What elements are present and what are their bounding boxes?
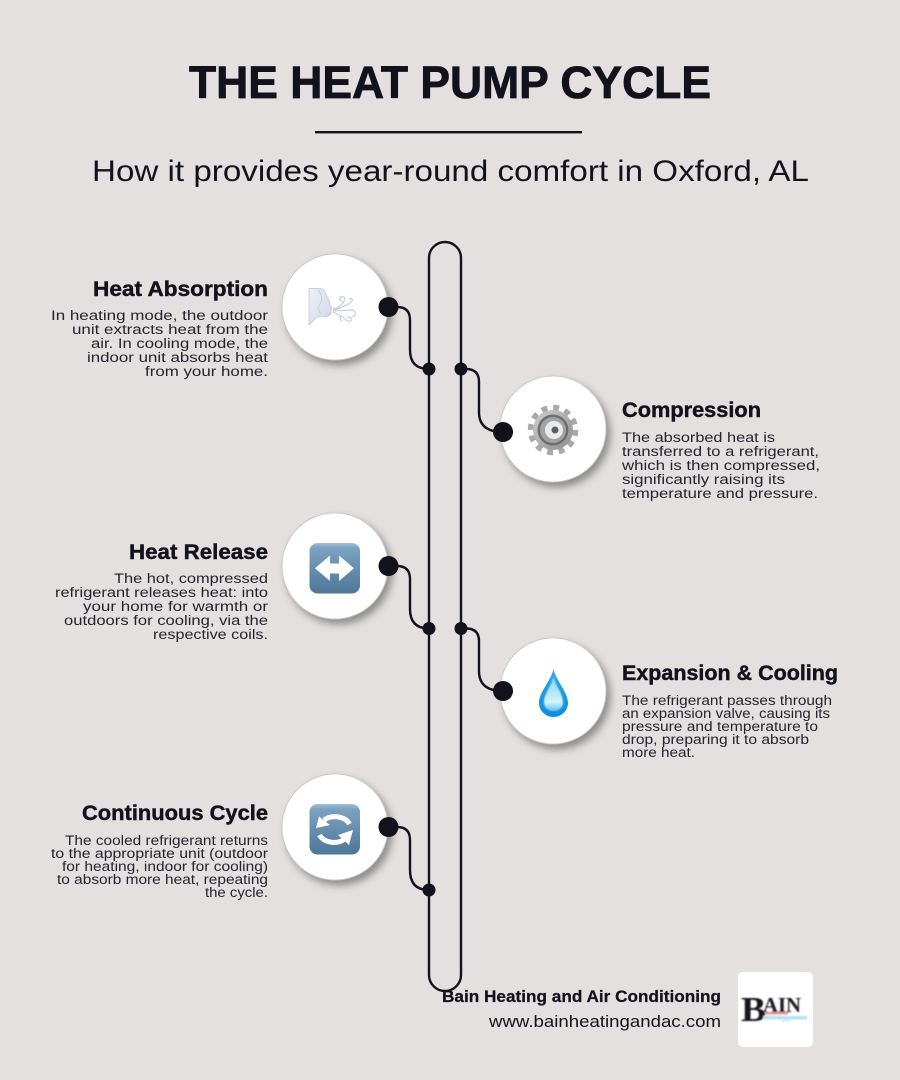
description: air. In cooling mode, the [91, 336, 268, 352]
description: from your home. [145, 364, 268, 380]
description: significantly raising its [622, 472, 785, 488]
connector [389, 827, 429, 890]
description: more heat. [622, 745, 695, 761]
logo [738, 972, 813, 1047]
title: THE HEAT PUMP CYCLE [189, 57, 711, 108]
connection dot [493, 681, 513, 701]
icon: face blowing wind [309, 288, 355, 325]
description: outdoors for cooling, via the [64, 613, 268, 629]
icon: gear [532, 408, 574, 452]
connection dot [493, 422, 513, 442]
description [621, 430, 820, 502]
description: which is then compressed, [621, 458, 820, 474]
icon circle [282, 513, 388, 619]
heading: Expansion & Cooling [622, 662, 838, 685]
connector [389, 566, 429, 628]
junction dot [422, 884, 436, 896]
connector [389, 307, 429, 369]
panel: Expansion & Cooling [454, 622, 838, 761]
central pipeline track [429, 242, 461, 991]
icon: water drop [539, 669, 568, 717]
heading: Continuous Cycle [82, 802, 268, 825]
connection dot [378, 817, 398, 837]
junction dot [422, 362, 436, 376]
description: transferred to a refrigerant, [622, 444, 819, 460]
description: The hot, compressed [114, 571, 268, 587]
footer: website: www.bainheatingandac.com [488, 1013, 721, 1031]
description [51, 833, 268, 901]
description: unit extracts heat from the [72, 322, 268, 338]
description: for heating, indoor for cooling) [62, 859, 268, 875]
description [51, 308, 268, 380]
footer: company name: Bain Heating and Air Conditioning [442, 987, 721, 1006]
description: respective coils. [153, 627, 268, 643]
icon circle [500, 638, 606, 744]
description: drop, preparing it to absorb [622, 732, 809, 748]
description: The refrigerant passes through [622, 693, 832, 709]
icon: cycle arrows button [310, 804, 360, 854]
logo: AIN [763, 993, 801, 1017]
connector [461, 369, 503, 432]
connector [461, 628, 503, 691]
description: refrigerant releases heat: into [55, 585, 268, 601]
logo: B [741, 990, 766, 1029]
subtitle: How it provides year-round comfort in Oxford, AL [92, 155, 809, 188]
description: your home for warmth or [83, 599, 268, 615]
description: pressure and temperature to [622, 719, 818, 735]
description [622, 693, 832, 761]
description: the cycle. [205, 885, 268, 901]
description: to absorb more heat, repeating [57, 872, 268, 888]
junction dot [454, 622, 468, 635]
icon circle [282, 774, 388, 880]
description: temperature and pressure. [622, 486, 818, 502]
panel: Compression [454, 362, 820, 502]
description: The absorbed heat is [622, 430, 775, 446]
description [55, 571, 268, 643]
junction dot [454, 362, 468, 376]
panel: Heat Absorption [51, 254, 436, 380]
description: indoor unit absorbs heat [87, 350, 268, 366]
junction dot [422, 622, 436, 635]
heading: Compression [622, 399, 761, 422]
icon circle [282, 254, 388, 360]
description: The cooled refrigerant returns [65, 833, 268, 849]
icon circle [500, 376, 606, 482]
heading: Heat Release [129, 541, 268, 564]
description: In heating mode, the outdoor [51, 308, 268, 324]
description: an expansion valve, causing its [622, 706, 830, 722]
panel: Continuous Cycle [51, 774, 436, 901]
connection dot [378, 297, 398, 317]
heading: Heat Absorption [93, 278, 268, 301]
description: to the appropriate unit (outdoor [51, 846, 268, 862]
panel: Heat Release [55, 513, 436, 643]
connection dot [378, 556, 398, 576]
icon: left-right arrow button [310, 543, 360, 594]
